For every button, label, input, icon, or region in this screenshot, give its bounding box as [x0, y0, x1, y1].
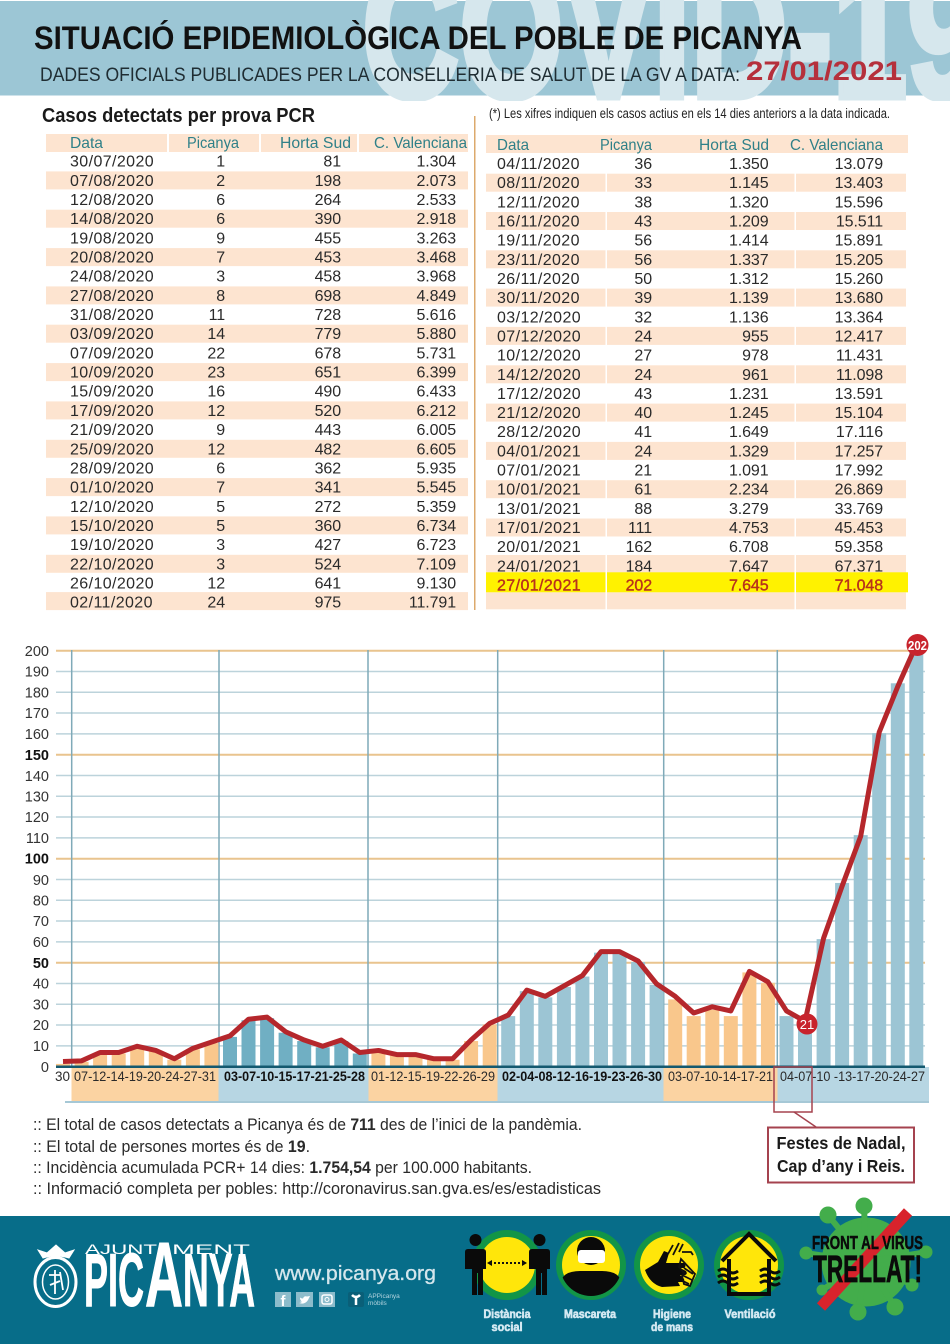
left table rows: 11 [209, 307, 225, 324]
left table rows: 9.130 [416, 575, 456, 592]
left table rows: 16 [207, 384, 225, 401]
right table rows: 24 [634, 367, 652, 384]
icon: hand hygiene [634, 1230, 704, 1300]
right table rows: 961 [742, 367, 769, 384]
right table rows: 13.364 [835, 309, 883, 326]
right table rows: 1.245 [729, 405, 769, 422]
right table rows: 13.403 [835, 175, 883, 192]
x-axis date labels [55, 1069, 925, 1084]
right table header: Data [497, 137, 529, 154]
icon: instagram [319, 1292, 335, 1307]
app label: APPicanya [368, 1293, 400, 1300]
left table rows: 728 [315, 307, 341, 324]
bars: daily values [56, 646, 923, 1066]
right table rows: 20/01/2021 [497, 539, 581, 556]
right table rows: 1.091 [729, 463, 769, 480]
right table rows: 19/11/2020 [497, 233, 580, 250]
left table rows: 14 [207, 326, 225, 343]
left table rows: 3 [216, 269, 225, 286]
right table rows: 955 [742, 328, 769, 345]
right table rows: 11.098 [836, 367, 883, 384]
right table header: Picanya [600, 137, 652, 154]
y-axis labels: 10 [33, 1039, 49, 1055]
y-axis labels: 90 [33, 873, 49, 889]
right table rows: 10/12/2020 [497, 348, 581, 365]
y-axis labels: 190 [25, 664, 49, 680]
left table rows: 12 [207, 441, 225, 458]
left table header: Picanya [187, 135, 239, 152]
marker: 21: 21 [800, 1017, 814, 1032]
right table rows: 08/11/2020 [497, 175, 580, 192]
left table rows: 15/09/2020 [70, 384, 154, 401]
right table rows: 15.596 [835, 194, 883, 211]
left table rows: 5.616 [416, 307, 456, 324]
trend line [63, 645, 916, 1061]
right table rows: 11.431 [836, 348, 883, 365]
left table rows: 490 [315, 384, 341, 401]
left table rows: 12 [207, 403, 225, 420]
right table rows: 1.231 [729, 386, 769, 403]
left table rows [70, 154, 456, 612]
icon labels: social [492, 1320, 522, 1334]
right table rows: 13.079 [835, 156, 883, 173]
right table rows: 2.234 [729, 482, 769, 499]
right table rows: 1.414 [729, 233, 769, 250]
right table rows: 7.647 [729, 558, 769, 575]
line and bar chart [25, 634, 929, 1103]
left table header: Data [70, 135, 103, 152]
right table rows: 36 [634, 156, 652, 173]
month separators [72, 650, 777, 1067]
left table rows: 31/08/2020 [70, 307, 154, 324]
right table rows: 14/12/2020 [497, 367, 581, 384]
left table header: C. Valenciana [374, 135, 467, 152]
left table rows: 3.468 [416, 250, 456, 267]
left table rows: 24/08/2020 [70, 269, 154, 286]
wordmark: AJUNTAMENT [85, 1241, 251, 1257]
icon: facebook: f [280, 1293, 286, 1310]
left table rows: 3 [216, 556, 225, 573]
right table rows: 162 [626, 539, 652, 556]
wordmark: PICANYA: PIC [84, 1238, 144, 1322]
right table rows: 56 [634, 252, 652, 269]
right table rows: 1.649 [729, 424, 769, 441]
right table header [497, 137, 883, 154]
right table header: C. Valenciana [790, 137, 883, 154]
left table rows: 24 [207, 595, 225, 612]
icon: mask [556, 1230, 626, 1300]
right table rows: 88 [634, 501, 652, 518]
y-axis labels: 50 [33, 956, 49, 972]
left table stripes [46, 134, 468, 610]
y-axis labels: 40 [33, 976, 49, 992]
left table rows: 07/08/2020 [70, 173, 154, 190]
icon labels [484, 1307, 776, 1334]
left table rows: 5.359 [416, 499, 456, 516]
marker: 21 [796, 1014, 818, 1034]
left table rows: 443 [315, 422, 341, 439]
left table rows: 25/09/2020 [70, 441, 154, 458]
right table rows: 04/11/2020 [497, 156, 580, 173]
right table rows: 24/01/2021 [497, 558, 581, 575]
left table rows: 6.433 [416, 384, 456, 401]
right table rows: 1.329 [729, 443, 769, 460]
right table rows: 1.136 [729, 309, 769, 326]
latest row: 27/01/2021: 71.048 [835, 578, 883, 594]
right table rows: 17.116 [836, 424, 883, 441]
right table rows: 15.104 [835, 405, 883, 422]
right table rows: 24 [634, 328, 652, 345]
left table rows: 4.849 [416, 288, 456, 305]
right table stripes [486, 135, 908, 609]
update date: 27/01/2021 [746, 56, 902, 86]
right table rows: 21 [634, 463, 652, 480]
left table rows: 272 [315, 499, 341, 516]
right table rows: 43 [634, 214, 652, 230]
callout text box: Festes de Nadal, [776, 1133, 906, 1153]
left table rows: 2.918 [416, 211, 456, 228]
right table rows: 15.260 [835, 271, 883, 288]
subtitle: DADES OFICIALS PUBLICADES PER LA CONSELLERIA DE SALUT DE LA GV A DATA: [40, 64, 740, 86]
left table rows: 07/09/2020 [70, 345, 154, 362]
right table rows: 03/12/2020 [497, 309, 581, 326]
left table rows: 19/10/2020 [70, 537, 154, 554]
right table rows: 27 [634, 348, 652, 365]
right table rows: 43 [634, 386, 652, 403]
left table rows: 1.304 [416, 154, 456, 171]
left table rows: 26/10/2020 [70, 575, 154, 592]
right table rows: 13.591 [835, 386, 883, 403]
right table rows: 26.869 [835, 482, 883, 499]
left table rows: 455 [315, 230, 341, 247]
left table rows: 12/08/2020 [70, 192, 154, 209]
left table rows: 7 [216, 250, 225, 267]
x-axis date labels: 03-07-10-15-17-21-25-28 [224, 1069, 365, 1084]
icon: social distance [465, 1230, 550, 1300]
right table rows: 13.680 [835, 290, 883, 307]
summary notes [33, 1116, 601, 1198]
left table rows: 3.968 [416, 269, 456, 286]
right table rows: 56 [634, 233, 652, 250]
left table rows: 1 [216, 154, 225, 171]
right table rows: 07/01/2021 [497, 463, 581, 480]
y-axis labels: 80 [33, 894, 49, 910]
title: SITUACIÓ EPIDEMIOLÒGICA DEL POBLE DE PICANYA [34, 19, 802, 56]
right table rows: 15.891 [835, 233, 883, 250]
left table rows: 20/08/2020 [70, 250, 154, 267]
right table rows: 1.139 [729, 290, 769, 307]
y-axis labels: 120 [25, 810, 49, 826]
wordmark: PICANYA: A [145, 1224, 183, 1326]
right table rows: 45.453 [835, 520, 883, 537]
y-axis labels: 30 [33, 998, 49, 1014]
right table rows: 1.320 [729, 194, 769, 211]
left table rows: 22 [207, 345, 225, 362]
summary notes: :: El total de casos detectats a Picanya és de 711 des de l’inici de la pandèmia. [33, 1116, 582, 1134]
left table rows: 678 [315, 345, 341, 362]
left table rows: 482 [315, 441, 341, 458]
left table rows: 524 [315, 556, 341, 573]
summary notes: :: El total de persones mortes és de 19. [33, 1138, 310, 1156]
right table rows: 32 [634, 309, 652, 326]
left table rows: 390 [315, 211, 341, 228]
callout connector [794, 1112, 816, 1127]
icon labels: de mans [651, 1320, 693, 1334]
left table rows: 14/08/2020 [70, 211, 154, 228]
right table rows: 41 [634, 424, 652, 441]
latest row: 27/01/2021 [497, 578, 883, 594]
left table rows: 7 [216, 480, 225, 497]
right table rows: 33 [634, 175, 652, 192]
left table rows: 2 [216, 173, 225, 190]
left table rows: 28/09/2020 [70, 460, 154, 477]
left table rows: 12/10/2020 [70, 499, 154, 516]
summary notes: :: Incidència acumulada PCR+ 14 dies: 1.754,54 per 100.000 habitants. [33, 1159, 532, 1177]
left table rows: 6.723 [416, 537, 456, 554]
highlighted latest row background [486, 572, 908, 592]
left table rows: 17/09/2020 [70, 403, 154, 420]
right table rows: 26/11/2020 [497, 271, 580, 288]
app label: mòbils [368, 1300, 388, 1307]
right table rows: 17/01/2021 [497, 520, 581, 537]
right table rows: 17.992 [835, 463, 883, 480]
right table rows: 23/11/2020 [497, 252, 580, 269]
left table rows: 8 [216, 288, 225, 305]
left table rows: 7.109 [416, 556, 456, 573]
header banner [0, 0, 950, 101]
left table rows: 9 [216, 422, 225, 439]
left table rows: 5 [216, 518, 225, 535]
icon labels: Ventilació [724, 1307, 776, 1321]
right table rows: 3.279 [729, 501, 769, 518]
icon: virus [800, 1198, 932, 1320]
left table header [70, 135, 467, 152]
left table rows: 19/08/2020 [70, 230, 154, 247]
left table rows: 2.533 [416, 192, 456, 209]
social media icons [275, 1292, 400, 1310]
left table rows: 779 [315, 326, 341, 343]
left table rows: 10/09/2020 [70, 365, 154, 382]
right table rows: 39 [634, 290, 652, 307]
left table rows: 5.731 [416, 345, 456, 362]
left table header: Horta Sud [280, 135, 351, 152]
left table rows: 6.005 [416, 422, 456, 439]
y-axis labels: 160 [25, 727, 49, 743]
y-axis labels: 200 [25, 644, 49, 660]
right table rows: 61 [634, 482, 652, 499]
right table rows: 10/01/2021 [497, 482, 581, 499]
y-axis labels: 140 [25, 769, 49, 785]
left table rows: 6.605 [416, 441, 456, 458]
right table rows [497, 156, 883, 594]
summary notes: :: Informació completa per pobles: http://coronavirus.san.gva.es/es/estadisticas [33, 1180, 601, 1198]
footer band [0, 1216, 950, 1344]
vertical table divider [474, 116, 476, 610]
left table rows: 698 [315, 288, 341, 305]
right table rows: 07/12/2020 [497, 328, 581, 345]
icon labels: Mascareta [564, 1307, 616, 1321]
left table rows: 11.791 [409, 595, 456, 612]
left table rows: 22/10/2020 [70, 556, 154, 573]
right table rows: 111 [628, 520, 652, 537]
left table rows: 15/10/2020 [70, 518, 154, 535]
right table rows: 21/12/2020 [497, 405, 581, 422]
right table rows: 1.209 [729, 214, 769, 230]
logo: Ajuntament de Picanya [35, 1224, 255, 1326]
left table rows: 6.399 [416, 365, 456, 382]
left table rows: 520 [315, 403, 341, 420]
icon: app [348, 1292, 364, 1307]
x-axis date labels: 30 [55, 1069, 70, 1084]
left table rows: 01/10/2020 [70, 480, 154, 497]
x-axis date labels: 01-12-15-19-22-26-29 [371, 1069, 495, 1084]
badge: front al virus, trellat [800, 1198, 932, 1320]
wordmark: PICANYA [84, 1224, 255, 1326]
table: left [46, 134, 468, 612]
right table rows: 15.511 [836, 214, 883, 230]
left table rows: 3.263 [416, 230, 456, 247]
right table rows: 15.205 [835, 252, 883, 269]
left table rows: 453 [315, 250, 341, 267]
right table rows: 50 [634, 271, 652, 288]
wordmark: AJUNTAMENT: AJUNT [85, 1241, 158, 1257]
y-axis labels: 60 [33, 935, 49, 951]
left table rows: 5.935 [416, 460, 456, 477]
left table rows: 360 [315, 518, 341, 535]
table: right [486, 135, 908, 610]
left table rows: 198 [315, 173, 341, 190]
x-axis date labels: 04-07-10 -13-17-20-24-27 [780, 1069, 925, 1084]
right table rows: 30/11/2020 [497, 290, 580, 307]
right table rows: 24 [634, 443, 652, 460]
y-axis labels: 170 [25, 706, 49, 722]
left table rows: 264 [315, 192, 341, 209]
left table rows: 5.545 [416, 480, 456, 497]
x-axis baseline [56, 1066, 925, 1068]
right table rows: 67.371 [835, 558, 883, 575]
left table rows: 362 [315, 460, 341, 477]
icon labels: Distància [484, 1307, 531, 1321]
left table rows: 21/09/2020 [70, 422, 154, 439]
left table rows: 6.734 [416, 518, 456, 535]
x-axis date labels: 03-07-10-14-17-21 [668, 1069, 773, 1084]
orange reference gridlines [56, 651, 925, 963]
latest row: 27/01/2021: 202 [626, 578, 652, 594]
left table rows: 5 [216, 499, 225, 516]
right table rows: 38 [634, 194, 652, 211]
left table rows: 341 [315, 480, 341, 497]
y-axis labels: 110 [26, 831, 49, 847]
left table rows: 12 [207, 575, 225, 592]
left table rows: 458 [315, 269, 341, 286]
left table rows: 3 [216, 537, 225, 554]
left table rows: 03/09/2020 [70, 326, 154, 343]
left table rows: 5.880 [416, 326, 456, 343]
y-axis labels [25, 644, 49, 1076]
left table rows: 9 [216, 230, 225, 247]
marker: 202: 202 [908, 638, 927, 653]
right table rows: 13/01/2021 [497, 501, 581, 518]
right table rows: 17/12/2020 [497, 386, 581, 403]
left table rows: 2.073 [416, 173, 456, 190]
left table rows: 27/08/2020 [70, 288, 154, 305]
right table rows: 978 [742, 348, 769, 365]
icon: ventilation [714, 1230, 784, 1300]
y-axis labels: 70 [33, 914, 49, 930]
left table rows: 23 [207, 365, 225, 382]
horizontal gridlines [56, 672, 925, 1046]
left table rows: 427 [315, 537, 341, 554]
wordmark: AJUNTAMENT: MENT [172, 1241, 251, 1257]
marker: 202 [906, 634, 928, 656]
y-axis labels: 150 [25, 748, 49, 764]
x-axis date labels: 02-04-08-12-16-19-23-26-30 [502, 1069, 662, 1084]
callout highlight box [774, 1067, 812, 1112]
left table rows: 975 [315, 595, 341, 612]
page canvas: NYA [183, 1238, 255, 1322]
latest row: 27/01/2021: 7.645 [729, 578, 769, 594]
right table rows: 40 [634, 405, 652, 422]
left table rows: 81 [323, 154, 341, 171]
latest row: 27/01/2021: 27/01/2021 [497, 578, 581, 594]
right table rows: 1.337 [729, 252, 769, 269]
right table rows: 4.753 [729, 520, 769, 537]
left table rows: 6 [216, 192, 225, 209]
left table rows: 6.212 [416, 403, 456, 420]
icon labels: Higiene [653, 1307, 691, 1321]
right table rows: 12.417 [835, 328, 883, 345]
right table rows: 6.708 [729, 539, 769, 556]
y-axis labels: 180 [25, 686, 49, 702]
x-axis month bands [65, 1067, 929, 1103]
right table rows: 04/01/2021 [497, 443, 581, 460]
app label [368, 1293, 400, 1307]
right table rows: 1.145 [729, 175, 769, 192]
left table rows: 02/11/2020 [70, 595, 153, 612]
y-axis labels: 0 [41, 1060, 49, 1076]
right table rows: 12/11/2020 [497, 194, 580, 211]
right table rows: 16/11/2020 [497, 214, 580, 230]
callout text box [768, 1128, 914, 1182]
icon: twitter [296, 1292, 313, 1307]
right table header: Horta Sud [699, 137, 769, 154]
right table rows: 33.769 [835, 501, 883, 518]
y-axis labels: 130 [25, 790, 49, 806]
left table rows: 6 [216, 460, 225, 477]
right table rows: 184 [626, 558, 652, 575]
callout text box: Cap d’any i Reis. [777, 1156, 905, 1176]
right table column dividers [606, 173, 796, 610]
x-axis date labels: 07-12-14-19-20-24-27-31 [74, 1069, 216, 1084]
icon: municipal crest [35, 1245, 76, 1306]
right table rows: 28/12/2020 [497, 424, 581, 441]
right table rows: 17.257 [835, 443, 883, 460]
left table rows: 30/07/2020 [70, 154, 154, 171]
right table rows: 1.312 [729, 271, 769, 288]
right table rows: 59.358 [835, 539, 883, 556]
red strike-through [821, 1212, 908, 1307]
left table rows: 651 [315, 365, 341, 382]
heading: PCR cases: Casos detectats per prova PCR [42, 105, 316, 127]
y-axis labels: 20 [33, 1018, 49, 1034]
website: www.picanya.org [274, 1263, 436, 1285]
callout: holidays [768, 1067, 914, 1182]
y-axis labels: 100 [25, 852, 49, 868]
left table rows: 641 [315, 575, 341, 592]
right table rows: 1.350 [729, 156, 769, 173]
left table rows: 6 [216, 211, 225, 228]
